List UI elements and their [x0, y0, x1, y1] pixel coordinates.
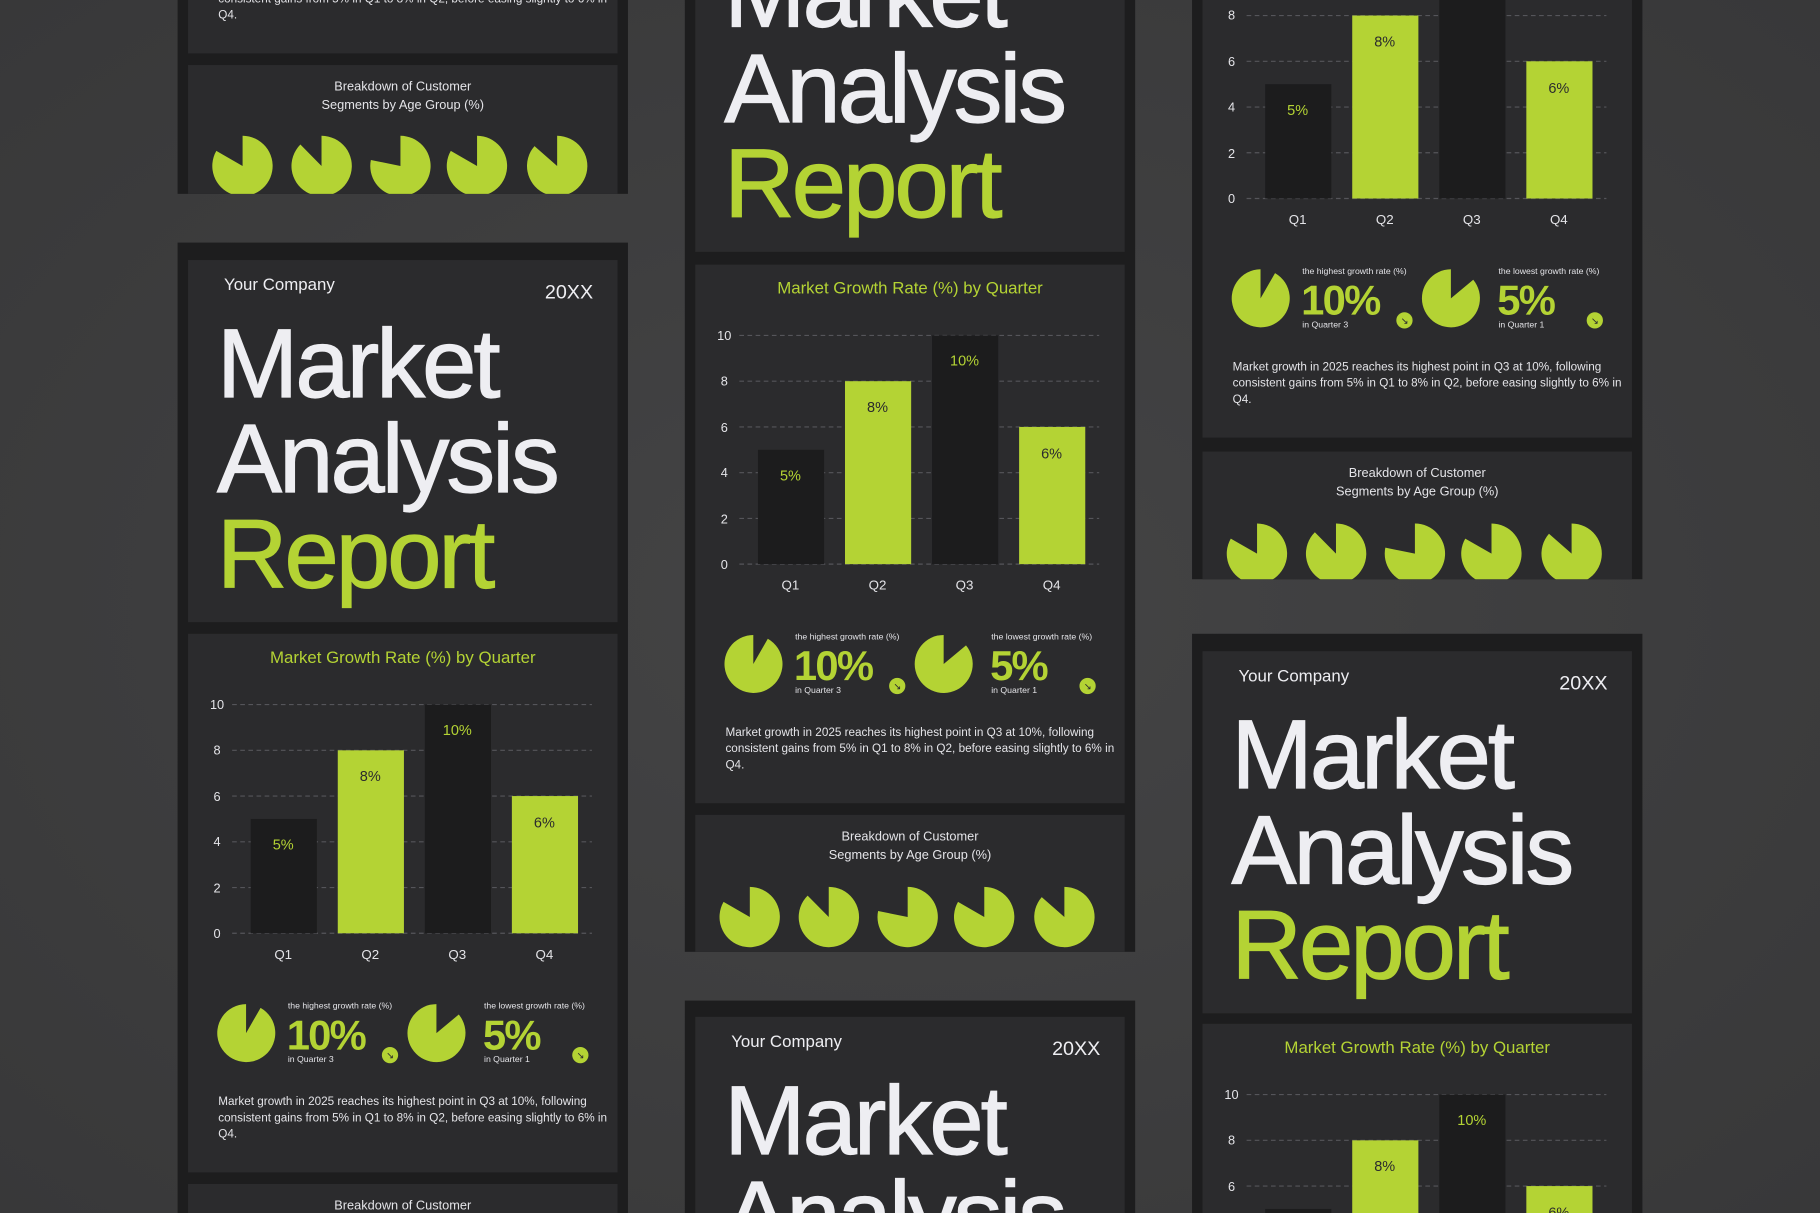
bar chart: growth by quarter: 6% [534, 816, 555, 832]
bar chart: growth by quarter: the lowest growth rate (%) [1498, 266, 1599, 276]
bar chart: growth by quarter: 0 [1228, 191, 1235, 206]
bar chart: growth by quarter: the lowest growth rate (%) [484, 1001, 585, 1011]
bar chart: growth by quarter: ↘ [576, 1051, 584, 1061]
title [724, 0, 1064, 238]
title: Analysis [1232, 795, 1571, 904]
panel: col3 chart (cropped bottom) [1202, 1024, 1632, 1213]
bar chart: growth by quarter: 5% [1287, 103, 1308, 119]
bar chart: growth by quarter: 10% [1301, 277, 1381, 324]
bar chart: growth by quarter: 10 [1224, 1087, 1239, 1102]
bar chart: growth by quarter: 5% [1497, 277, 1556, 324]
bar chart: growth by quarter: Market Growth Rate (%) by Quarter [777, 279, 1043, 298]
bar chart: growth by quarter [1224, 1038, 1606, 1213]
bar chart: growth by quarter: 6 [1228, 54, 1235, 69]
title: Market [1232, 700, 1512, 809]
bar chart: growth by quarter: in Quarter 3 [795, 685, 841, 695]
title: Market [217, 309, 498, 418]
panel: col1 age group pies [188, 65, 617, 194]
bar chart: growth by quarter: in Quarter 3 [1302, 319, 1348, 329]
bar chart: growth by quarter: ↘ [1591, 316, 1599, 326]
text: company: Your Company [1238, 667, 1349, 686]
bar chart: growth by quarter: 10% [1457, 1113, 1486, 1129]
panel: col1 title [188, 260, 617, 622]
bar chart: growth by quarter [210, 648, 592, 1064]
frame: column 1 second card [178, 243, 628, 1213]
title [1230, 700, 1572, 1000]
title: Market [724, 1066, 1005, 1175]
heading: age group: Segments by Age Group (%) [321, 99, 484, 113]
heading: age group: Breakdown of Customer [334, 1199, 471, 1213]
title: Report [724, 129, 1000, 238]
bar chart: growth by quarter: 5% [483, 1011, 541, 1058]
text: year: 20XX [1559, 672, 1608, 694]
bar chart: growth by quarter: 4 [214, 834, 221, 849]
bar chart: growth by quarter: ↘ [893, 681, 901, 691]
bar chart: growth by quarter: 2 [721, 512, 728, 527]
text: chart summary: Market growth in 2025 reaches its highest point in Q3 at 10%, following consistent gains from 5% in Q1 to 8% in Q2, before easing slightly to 6% in Q4. [725, 727, 1114, 772]
text: chart summary: Market growth in 2025 reaches its highest point in Q3 at 10%, following consistent gains from 5% in Q1 to 8% in Q2, before easing slightly to 6% in Q4. [1233, 361, 1621, 406]
bar chart: growth by quarter: the highest growth rate (%) [795, 632, 899, 642]
bar chart: growth by quarter: the lowest growth rate (%) [991, 632, 1092, 642]
frame: column 3 top card [1192, 0, 1642, 579]
bar chart: growth by quarter: 8% [1374, 34, 1395, 50]
bar chart: growth by quarter: 10% [287, 1011, 367, 1058]
heading: age group [321, 80, 484, 113]
title: Analysis [724, 34, 1064, 143]
bar chart: growth by quarter: 8 [721, 373, 728, 388]
bar chart: growth by quarter: Q1 [782, 578, 799, 593]
heading: age group: Breakdown of Customer [842, 830, 978, 844]
panel: col3 title [1202, 651, 1632, 1013]
bar chart: growth by quarter: 4 [721, 465, 728, 480]
title [216, 309, 557, 608]
bar chart: growth by quarter: Q2 [361, 947, 379, 962]
panel: col3 chart (cropped top) [1202, 0, 1632, 438]
bar chart: growth by quarter: 10% [443, 723, 472, 739]
bar chart: growth by quarter [717, 279, 1100, 695]
bar chart: growth by quarter: in Quarter 3 [288, 1054, 334, 1064]
title [724, 1066, 1064, 1213]
panel: col2 chart [695, 265, 1125, 803]
panel: col1 age group (cropped) [188, 1184, 617, 1213]
bar chart: growth by quarter: Q4 [1043, 578, 1061, 593]
bar chart: growth by quarter: ↘ [1401, 316, 1408, 326]
bar chart: growth by quarter: 10% [794, 642, 874, 689]
bar chart: growth by quarter: 5% [273, 838, 294, 854]
bar chart: growth by quarter: Q4 [535, 947, 554, 962]
bar chart: growth by quarter: Q2 [1376, 212, 1394, 227]
bar chart: growth by quarter: 4 [1228, 99, 1235, 114]
bar chart: growth by quarter: in Quarter 1 [991, 685, 1037, 695]
bar chart: growth by quarter: 10% [950, 354, 979, 370]
bar chart: growth by quarter: 2 [1228, 146, 1235, 161]
bar chart: growth by quarter: in Quarter 1 [1498, 319, 1545, 329]
bar chart: growth by quarter: Q3 [956, 578, 973, 593]
bar chart: growth by quarter: 8 [1228, 8, 1235, 23]
text: year: 20XX [1052, 1038, 1100, 1060]
bar chart: growth by quarter: Q3 [448, 947, 466, 962]
bar chart: growth by quarter: 6% [1041, 447, 1062, 463]
bar chart: growth by quarter: 5% [780, 469, 801, 485]
bar chart: growth by quarter: 2 [214, 881, 221, 896]
bar chart: growth by quarter: 0 [214, 926, 221, 941]
panel: col2 age group pies [695, 815, 1125, 952]
title: Report [217, 499, 492, 608]
bar chart: growth by quarter [1228, 0, 1606, 329]
bar chart: growth by quarter: 8 [1228, 1133, 1235, 1148]
bar chart: growth by quarter: ↘ [386, 1051, 394, 1061]
title: Report [1232, 890, 1507, 999]
heading: age group: Breakdown of Customer [334, 80, 471, 94]
bar chart: growth by quarter: 8% [867, 400, 888, 416]
heading: age group: Segments by Age Group (%) [1336, 485, 1498, 499]
bar chart: growth by quarter: the highest growth rate (%) [1302, 266, 1407, 276]
bar chart: growth by quarter: Q4 [1550, 212, 1568, 227]
bar chart: growth by quarter: Q3 [1463, 212, 1481, 227]
frame: column 2 bottom card [685, 1001, 1135, 1213]
bar chart: growth by quarter: 8% [360, 769, 381, 785]
bar chart: growth by quarter: 10 [717, 328, 731, 343]
bar chart: growth by quarter: 0 [721, 557, 728, 572]
panel: col3 age group pies [1202, 452, 1632, 579]
text: company: Your Company [224, 276, 335, 295]
icon row: pies [1226, 524, 1602, 580]
bar chart: growth by quarter: 6 [214, 789, 221, 804]
bar chart: growth by quarter: Q1 [1289, 212, 1307, 227]
heading: age group: Breakdown of Customer [1349, 467, 1486, 481]
panel: col2 bottom title [695, 1017, 1125, 1213]
icon row: pies [212, 136, 588, 194]
bar chart: growth by quarter: the highest growth rate (%) [288, 1001, 392, 1011]
bar chart: growth by quarter: 6 [1228, 1179, 1235, 1194]
panel: col1 chart [188, 634, 617, 1172]
text: year: 20XX [545, 281, 593, 303]
bar chart: growth by quarter: Market Growth Rate (%) by Quarter [1284, 1038, 1550, 1057]
bar chart: growth by quarter: ↘ [1084, 681, 1091, 691]
bar chart: growth by quarter: 5% [990, 642, 1049, 689]
text: chart summary: Market growth in 2025 reaches its highest point in Q3 at 10%, following consistent gains from 5% in Q1 to 8% in Q2, before easing slightly to 6% in Q4. [218, 1096, 607, 1141]
text: company: Your Company [731, 1033, 842, 1052]
heading: age group [1336, 467, 1498, 499]
panel: col1 chart (cropped top) [188, 0, 617, 53]
bar chart: growth by quarter: 6 [721, 420, 728, 435]
bar chart: growth by quarter: 8% [1374, 1159, 1395, 1175]
bar chart: growth by quarter: 8 [214, 743, 221, 758]
bar chart: growth by quarter: 10 [210, 697, 224, 712]
panel: col2 title [695, 0, 1125, 252]
bar chart: growth by quarter: in Quarter 1 [484, 1054, 530, 1064]
bar chart: growth by quarter: Q1 [274, 947, 292, 962]
bar chart: growth by quarter: 6% [1548, 81, 1569, 97]
heading: age group [829, 830, 991, 862]
bar chart: growth by quarter: Q2 [869, 578, 886, 593]
bar chart: growth by quarter: Market Growth Rate (%) by Quarter [270, 648, 536, 667]
title: Analysis [217, 404, 557, 513]
frame: column 3 bottom card [1192, 634, 1642, 1213]
frame: column 1 top card [178, 0, 628, 194]
heading: age group: Segments by Age Group (%) [829, 849, 991, 862]
icon row: pies [720, 886, 1095, 948]
frame: column 2 top card [685, 0, 1135, 952]
